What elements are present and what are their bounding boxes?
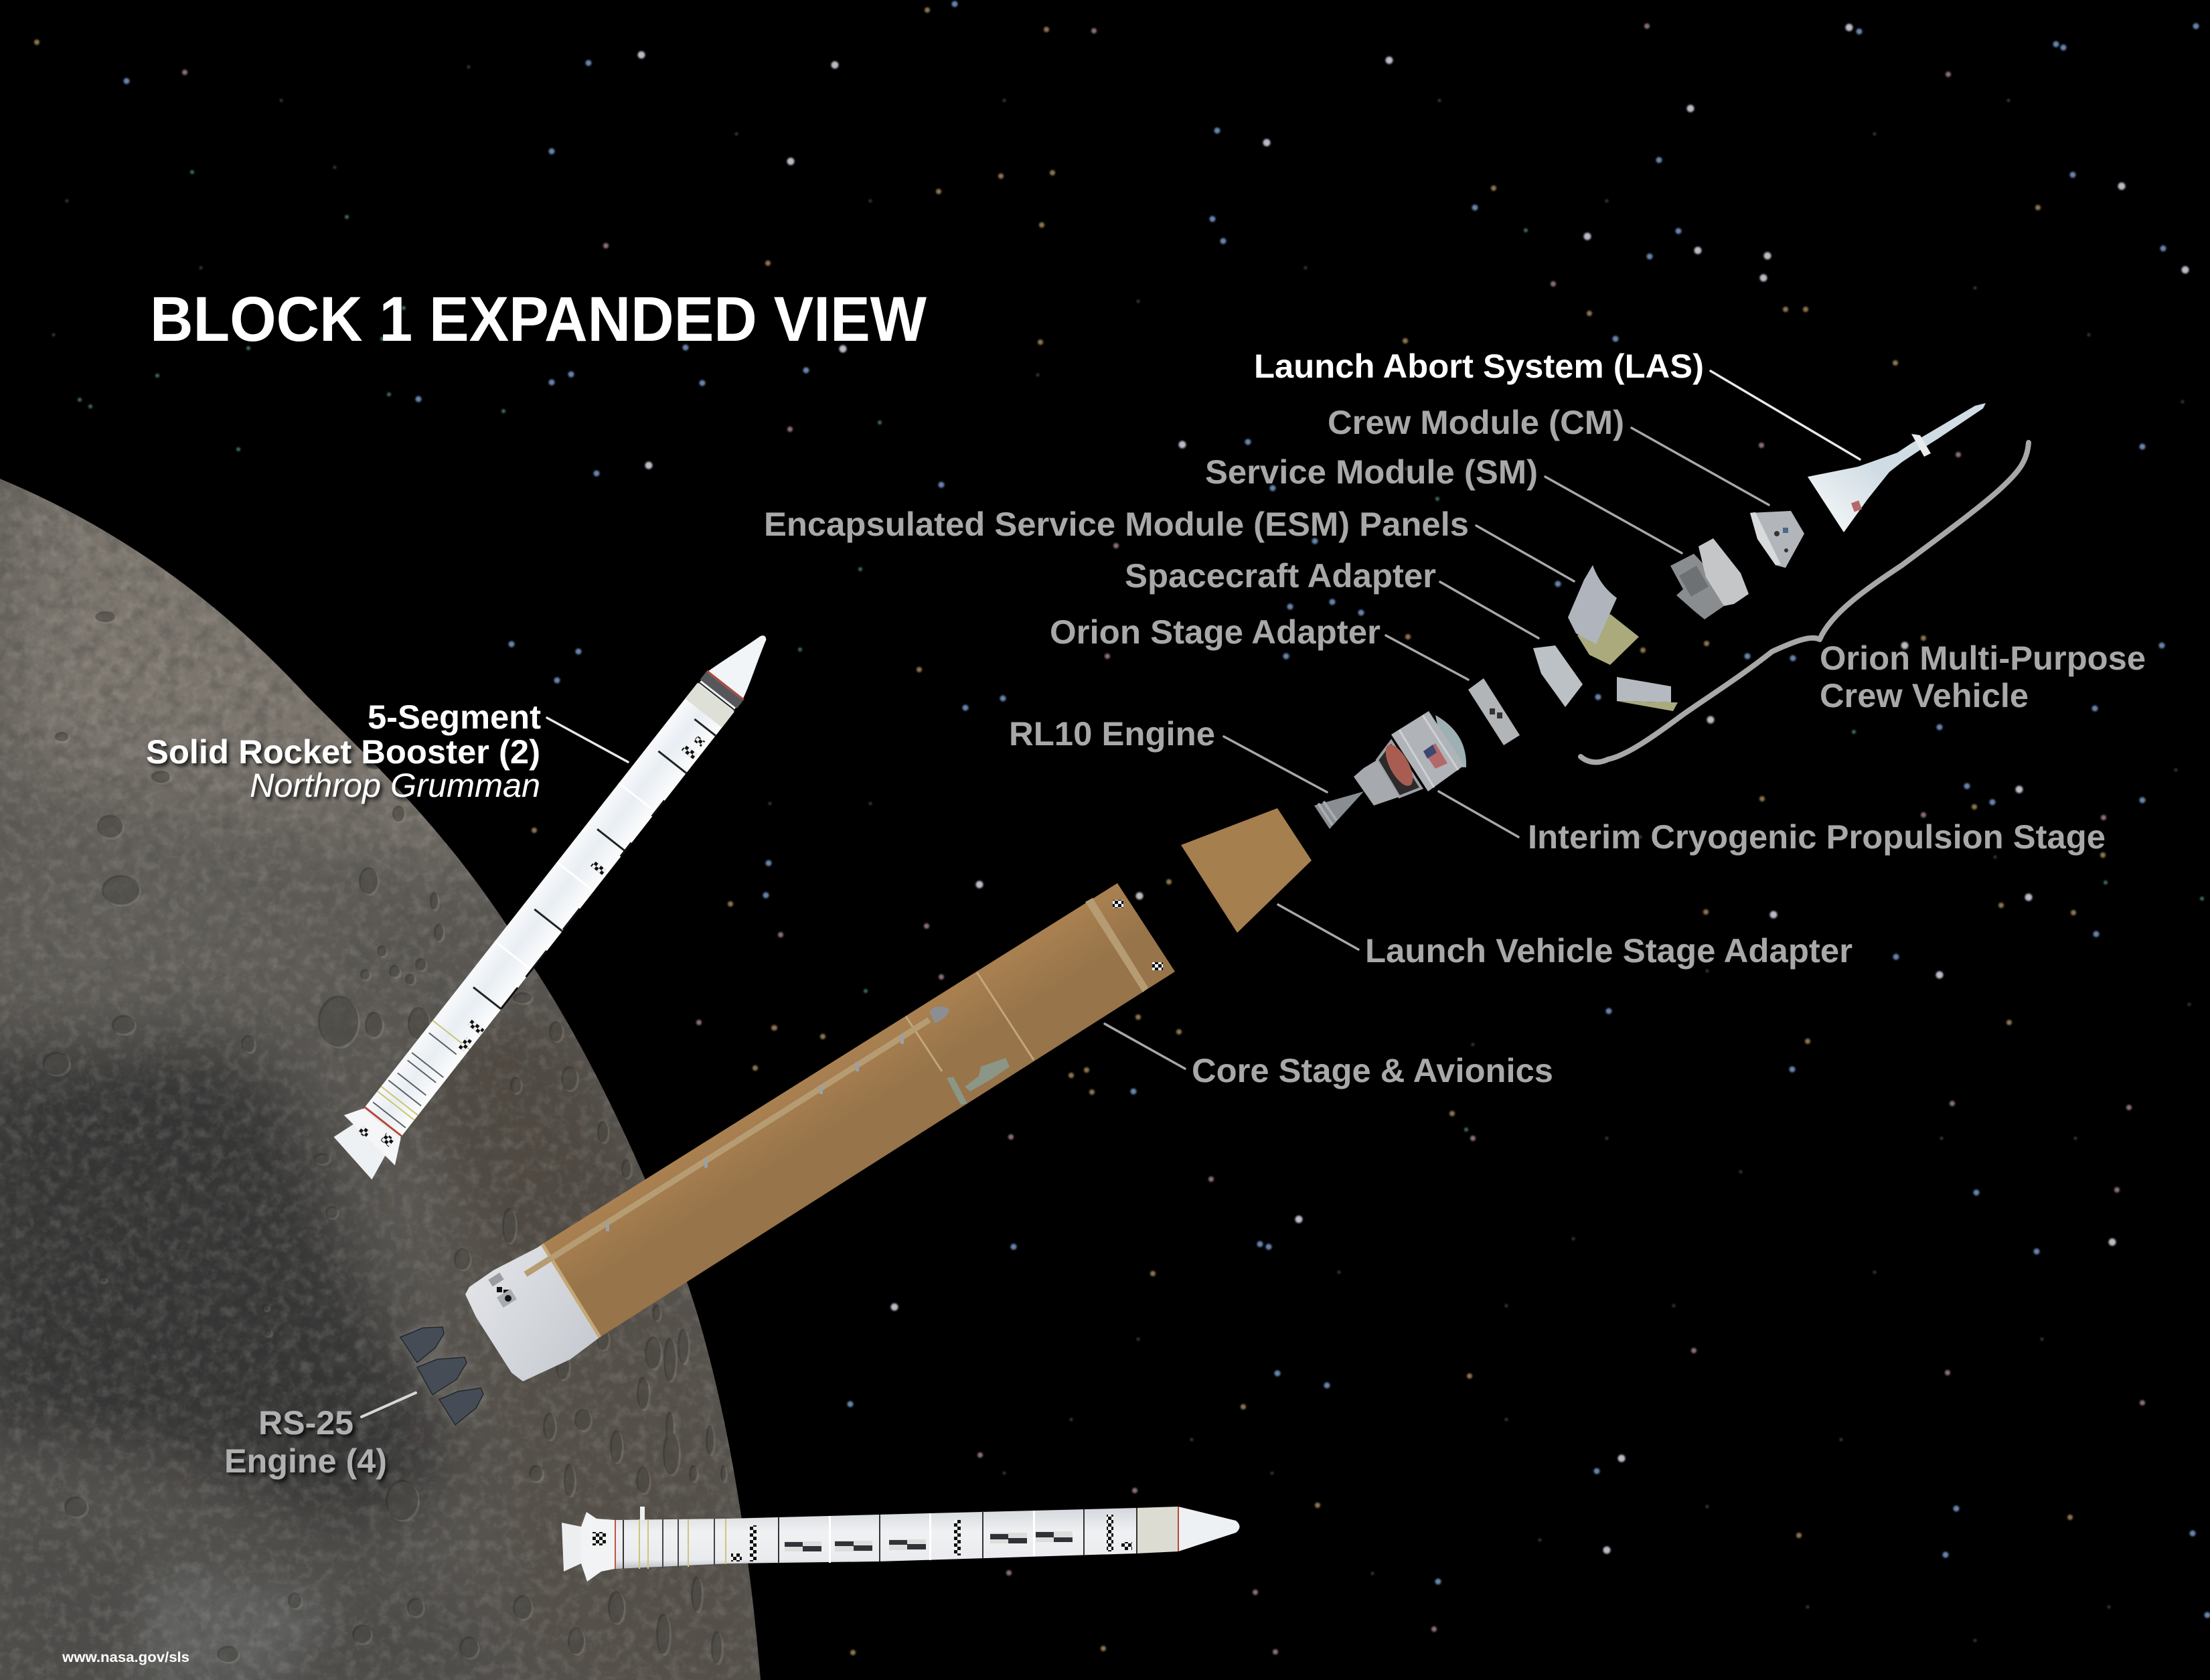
launch abort system (1808, 403, 1986, 532)
raceway brackets (606, 1035, 904, 1231)
nozzle (562, 1523, 581, 1572)
aft skirt (339, 1102, 410, 1165)
crew module (1750, 511, 1804, 568)
dome (1435, 715, 1466, 767)
label: crew module: Crew Module (CM) (1328, 404, 1624, 441)
core stage (465, 883, 1175, 1381)
bracket: orion multi-purpose crew vehicle (1581, 443, 2029, 762)
engine section detail (488, 1273, 517, 1308)
encapsulated service module panel, lower (1617, 677, 1678, 711)
forward checker marks (1113, 900, 1163, 970)
intertank band (1085, 898, 1148, 992)
label: orion stage adapter: Orion Stage Adapter (1050, 613, 1380, 651)
label: solid rocket booster: 5-Segment (368, 698, 541, 736)
forward seam lines (906, 972, 1034, 1071)
checker markings (358, 722, 708, 1154)
nozzle (327, 1118, 392, 1180)
cylinder (1391, 711, 1464, 791)
ivory section (1137, 1507, 1178, 1553)
url: www.nasa.gov/sls (62, 1650, 189, 1665)
spacecraft adapter (1533, 645, 1583, 707)
RL10 engine (1314, 791, 1364, 829)
flag (1423, 743, 1447, 769)
raceway (526, 1020, 929, 1274)
interim cryogenic propulsion stage (1354, 711, 1466, 806)
label: RS-25 engine (224, 1404, 387, 1480)
label: RS-25 engine: RS-25 (258, 1404, 353, 1442)
red tank (1380, 741, 1418, 790)
label: RL10 engine: RL10 Engine (1009, 715, 1215, 753)
nose bands (685, 670, 744, 727)
avionics hardware (947, 1058, 1010, 1105)
orion stage adapter (1468, 678, 1520, 745)
stepped roll markings (785, 1531, 1073, 1551)
encapsulated service module panel, green (1577, 614, 1639, 665)
nose cone (1178, 1507, 1240, 1551)
segment joint lines (372, 707, 716, 1130)
ribs and coloured stripes (364, 782, 656, 1137)
case (364, 670, 744, 1138)
label: RS-25 engine: Engine (4) (224, 1442, 387, 1480)
RS-25 engines (400, 1327, 483, 1425)
label: spacecraft adapter: Spacecraft Adapter (1125, 557, 1436, 595)
jettison motor nozzles (1911, 434, 1931, 457)
label: solid rocket booster (146, 698, 541, 804)
engine glow (400, 1327, 483, 1425)
booster, lower (562, 1507, 1240, 1582)
booster, upper (5-segment solid rocket booster) (323, 614, 793, 1185)
attach tab (640, 1507, 645, 1520)
raceway fairing head (929, 1006, 949, 1023)
checker columns (593, 1515, 1132, 1561)
label: interim cryogenic propulsion stage: Interim Cryogenic Propulsion Stage (1528, 818, 2106, 856)
lower box (1354, 760, 1399, 806)
label: encapsulated service module panels: Encapsulated Service Module (ESM) Panels (764, 506, 1469, 543)
nose cone (708, 622, 781, 698)
label: launch vehicle stage adapter: Launch Vehicle Stage Adapter (1365, 932, 1852, 970)
label: service module: Service Module (SM) (1205, 453, 1538, 491)
label: launch abort system: Launch Abort System (LAS) (1254, 348, 1704, 385)
label: orion multi-purpose crew vehicle (1820, 639, 2146, 714)
aft skirt (581, 1512, 615, 1582)
encapsulated service module panel, grey (1568, 565, 1617, 644)
label: orion multi-purpose crew vehicle: Orion Multi-Purpose (1820, 639, 2146, 677)
label: core stage and avionics: Core Stage & Avionics (1192, 1052, 1553, 1089)
flag (1851, 500, 1862, 512)
tank (542, 883, 1175, 1337)
engine section (465, 1244, 600, 1381)
title: BLOCK 1 EXPANDED VIEW (150, 284, 927, 355)
service module (1670, 538, 1749, 619)
cylinder ribs (1399, 715, 1458, 787)
case (615, 1508, 1137, 1569)
launch vehicle stage adapter (1181, 808, 1312, 933)
black edge dashes (500, 800, 665, 1009)
label: orion multi-purpose crew vehicle: Crew Vehicle (1820, 677, 2029, 714)
leader lines (362, 371, 1860, 1417)
stripes (615, 1507, 1179, 1569)
label: solid rocket booster: Northrop Grumman (250, 767, 540, 804)
label: solid rocket booster: Solid Rocket Booster (2) (146, 733, 540, 771)
moon surface (0, 455, 790, 1680)
truss (1377, 741, 1421, 797)
aft seam (542, 1244, 600, 1337)
